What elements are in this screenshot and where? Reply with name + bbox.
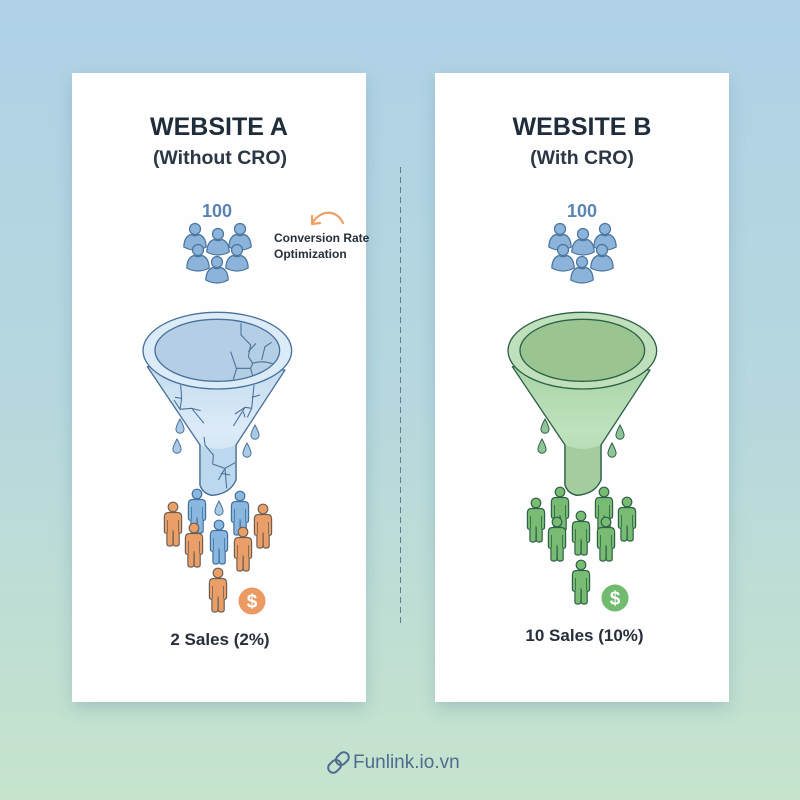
drops B: [538, 419, 624, 457]
callout text: Optimization: [274, 247, 347, 261]
icon: green dollar coin: $: [610, 588, 621, 610]
icon: orange dollar coin: $: [247, 592, 258, 612]
panel: Website B: [435, 73, 729, 702]
result: 2 sales: 2 Sales (2%): [170, 630, 270, 649]
funnel: cracked blue: [143, 312, 292, 495]
leaking drops A: [173, 419, 259, 515]
heading: Website A: WEBSITE A: [150, 113, 288, 141]
funnel: intact green: [508, 312, 657, 495]
icon: visitor crowd B: [549, 224, 616, 283]
people: converted visitors B: [527, 487, 636, 604]
card B: [435, 73, 729, 702]
panel: Website A: [72, 73, 370, 702]
callout: Conversion Rate Optimization: [274, 213, 370, 261]
icon: green dollar coin: [602, 584, 628, 612]
people: lost visitors and buyers A: [164, 489, 272, 612]
visitor count A: 100: [202, 201, 232, 221]
result: 10 sales: 10 Sales (10%): [525, 626, 644, 645]
brand text: Funlink.io.vn: [353, 752, 460, 773]
icon: orange dollar coin: [238, 588, 266, 614]
arrow: curved orange: [312, 213, 343, 224]
footer brand: [326, 750, 460, 775]
icon: visitor crowd A: [184, 224, 251, 283]
subheading: With CRO: (With CRO): [530, 147, 634, 169]
card A: [72, 73, 366, 702]
heading: Website B: WEBSITE B: [513, 113, 651, 141]
cracks: [174, 323, 273, 488]
visitor count B: 100: [567, 201, 597, 221]
callout text: Conversion Rate: [274, 231, 370, 245]
divider: [400, 167, 402, 625]
subheading: Without CRO: (Without CRO): [153, 147, 287, 169]
icon: chain link: [326, 750, 351, 775]
